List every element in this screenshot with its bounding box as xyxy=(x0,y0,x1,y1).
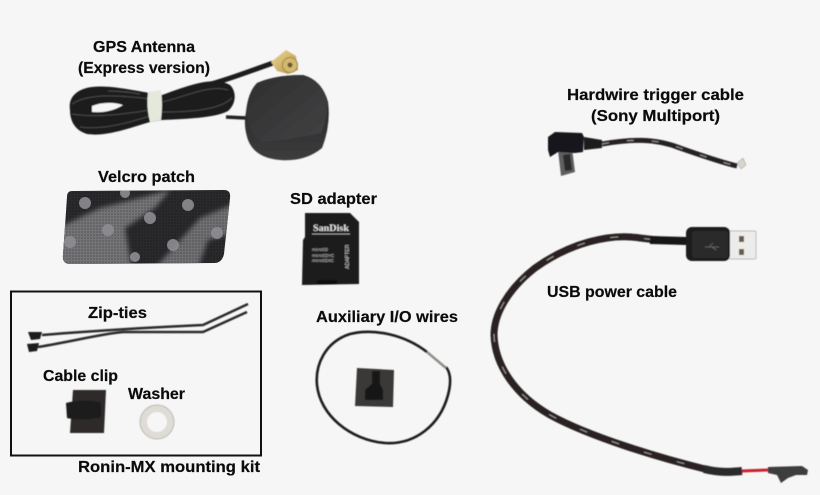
zip-ties xyxy=(27,304,248,352)
power connector xyxy=(704,469,742,472)
SD card printed text: SanDisk xyxy=(313,224,350,234)
washer xyxy=(140,405,174,439)
label: auxiliary I/O wires: Auxiliary I/O wires xyxy=(316,309,458,326)
label: zip-ties: Zip-ties xyxy=(88,305,147,322)
panel: Ronin-MX mounting kit xyxy=(11,292,261,476)
GPS antenna xyxy=(70,50,329,160)
label: USB power cable: USB power cable xyxy=(547,284,677,301)
label: washer: Washer xyxy=(128,386,185,403)
SD card printed text: microSD xyxy=(312,247,328,252)
hardwire trigger cable xyxy=(548,132,746,176)
label: cable clip: Cable clip xyxy=(43,368,118,385)
label: Hardwire trigger cable xyxy=(567,87,744,125)
auxiliary I/O wires xyxy=(317,332,450,443)
SD card printed text: microSDXC xyxy=(312,258,334,263)
SD adapter xyxy=(302,213,359,285)
label: Hardwire trigger cable: Hardwire trigger cable xyxy=(567,87,744,104)
cable clip xyxy=(66,390,106,433)
SD card printed text: ADAPTER xyxy=(345,244,351,269)
mount block xyxy=(355,368,394,407)
label: Velcro patch: Velcro patch xyxy=(98,169,195,186)
label: kit name: Ronin-MX mounting kit xyxy=(78,459,261,476)
antenna puck xyxy=(245,75,329,160)
antenna cable coil xyxy=(70,63,273,135)
SMA connector xyxy=(271,50,298,74)
USB plug xyxy=(650,240,686,241)
label: GPS antenna: GPS Antenna xyxy=(93,39,195,56)
cable tie band xyxy=(147,90,162,122)
SD card printed text xyxy=(312,224,351,269)
SD card printed text: microSDHC xyxy=(312,253,334,258)
label: Hardwire trigger cable: (Sony Multiport) xyxy=(591,108,720,125)
Velcro patch xyxy=(62,190,230,264)
label: SD adapter: SD adapter xyxy=(290,191,377,208)
label: GPS antenna: (Express version) xyxy=(78,60,210,77)
label: GPS antenna xyxy=(78,39,210,77)
USB power cable xyxy=(494,227,808,483)
